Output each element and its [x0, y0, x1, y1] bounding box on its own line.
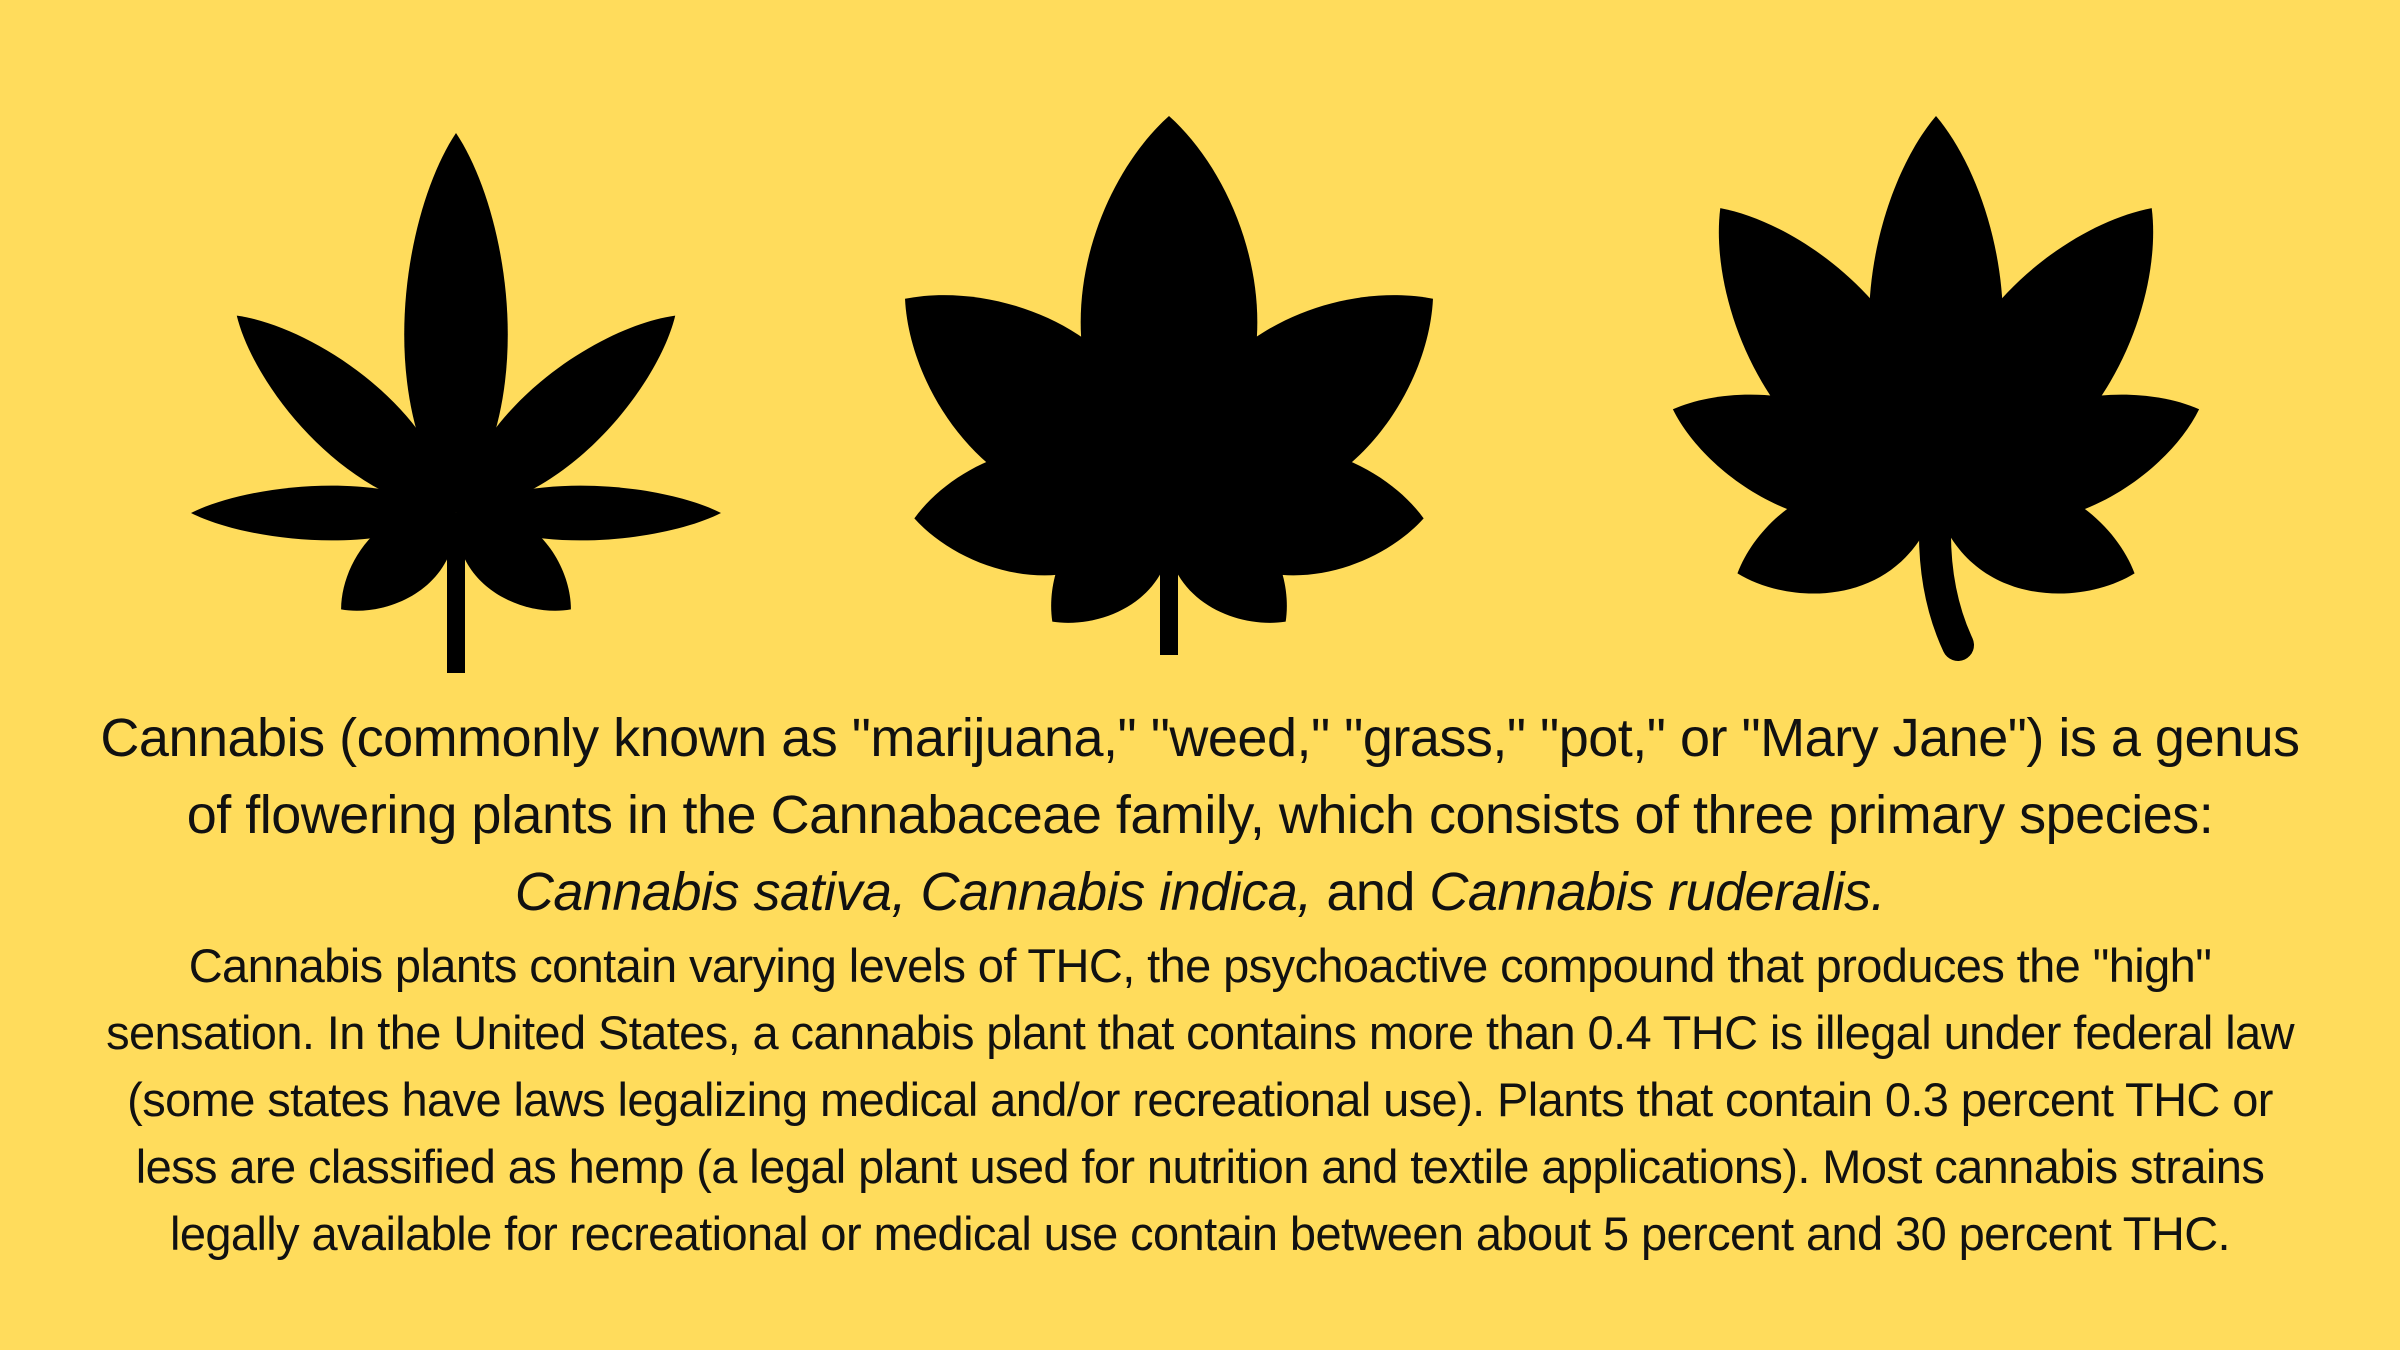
text block: THC details: (some states have laws legalizing medical and/or recreational use). Plants that contain 0.3 percent THC or	[127, 1073, 2273, 1126]
icon: sativa leaf	[191, 133, 721, 673]
text block: definition: Cannabis sativa, Cannabis indica, and Cannabis ruderalis.	[515, 862, 1885, 922]
icon: ruderalis leaf	[1654, 116, 2218, 645]
icon: indica leaf	[856, 116, 1482, 655]
text block: definition: of flowering plants in the Cannabaceae family, which consists of three primary species:	[187, 785, 2213, 845]
text block: THC details: legally available for recreational or medical use contain between about 5 percent and 30 percent THC.	[170, 1207, 2230, 1260]
text block: THC details	[106, 939, 2295, 1260]
text block: THC details: Cannabis plants contain varying levels of THC, the psychoactive compound that produces the "high"	[189, 939, 2211, 992]
illustration: three cannabis leaves	[191, 116, 2200, 673]
text block: THC details: less are classified as hemp (a legal plant used for nutrition and textile applications). Most cannabis strains	[136, 1140, 2264, 1193]
text block: THC details: sensation. In the United States, a cannabis plant that contains more than 0.4 THC is illegal under federal law	[106, 1006, 2294, 1059]
text block: definition	[100, 708, 2300, 922]
text block: definition: Cannabis (commonly known as "marijuana," "weed," "grass," "pot," or "Mary Jane") is a genus	[100, 708, 2300, 768]
